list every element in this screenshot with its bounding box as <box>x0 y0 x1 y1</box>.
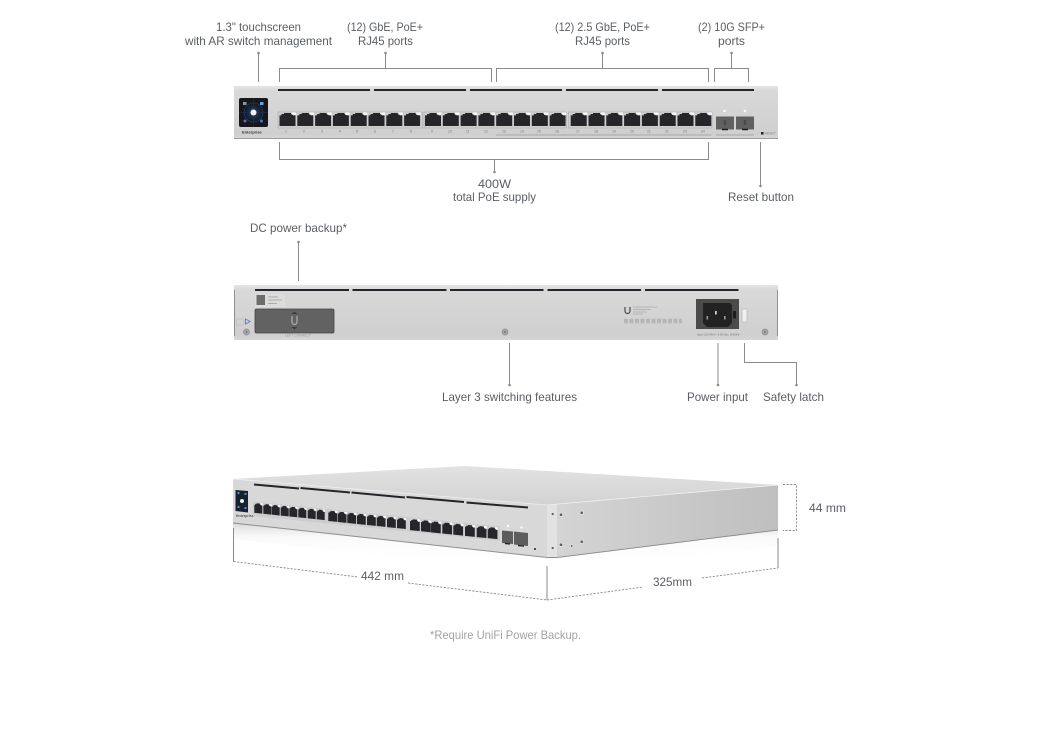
PoE indicator bars <box>496 134 754 136</box>
footnote: *Require UniFi Power Backup. <box>430 628 581 642</box>
callout: reset button <box>728 142 794 204</box>
port numbers: 3 <box>321 130 323 134</box>
callout: power input <box>687 343 749 404</box>
slots in perspective <box>254 484 528 508</box>
RJ45 port group frames <box>278 112 712 128</box>
port numbers: 17 <box>576 130 580 134</box>
callout: GbE ports <box>280 20 492 82</box>
panel: front view of switch <box>234 86 778 139</box>
port numbers: 23 <box>683 130 687 134</box>
callout: layer 3 switching: Layer 3 switching features <box>442 390 577 404</box>
screen in perspective: Enterprise <box>236 514 254 518</box>
rear screws <box>244 329 768 335</box>
port numbers: 11 <box>466 130 470 134</box>
reset button: RESET <box>764 132 776 136</box>
port numbers: 12 <box>484 130 488 134</box>
icon: blue arrow <box>236 319 250 325</box>
front corner band <box>547 504 557 557</box>
2.5 GbE RJ45 ports 17-24 <box>571 112 712 126</box>
shadow under device <box>233 523 778 573</box>
callout: SFP+ ports <box>698 20 765 82</box>
callout: GbE ports: (12) GbE, PoE+ <box>347 20 423 34</box>
port numbers: 1 <box>285 130 287 134</box>
vent slots <box>278 89 754 91</box>
compliance marks <box>624 307 682 321</box>
callout: SFP+ ports: ports <box>718 34 745 48</box>
callout: layer 3 switching <box>442 343 577 404</box>
port numbers: 2 <box>303 130 305 134</box>
callout: GbE ports: RJ45 ports <box>358 34 413 48</box>
top surface <box>233 466 778 505</box>
port numbers: 8 <box>410 130 412 134</box>
touchscreen: Enterprise <box>242 130 263 134</box>
port numbers: 5 <box>356 130 358 134</box>
port numbers <box>285 130 705 134</box>
DC power backup port cover <box>255 309 334 338</box>
port numbers: 19 <box>612 130 616 134</box>
port band <box>253 502 500 541</box>
power input socket: Input: 100-240V~ 6.5A Max. 50/60Hz <box>697 332 740 336</box>
screen in perspective <box>236 490 254 518</box>
port numbers: 14 <box>520 130 524 134</box>
dimension: depth 325 mm: 325mm <box>653 575 692 589</box>
power input socket <box>696 299 740 336</box>
dimension: width 442 mm <box>234 528 547 600</box>
callout: 2.5 GbE ports: RJ45 ports <box>575 34 630 48</box>
side screws <box>551 511 761 550</box>
panel: rear view of switch <box>234 285 778 340</box>
SFP+ ports in perspective <box>502 525 536 550</box>
panel: 3D view of switch <box>233 466 778 573</box>
QR label <box>255 294 285 307</box>
DC power backup port cover: LEFT CONNECT <box>285 334 311 338</box>
GbE RJ45 ports 1-8 <box>280 112 421 126</box>
port numbers: 13 <box>502 130 506 134</box>
port numbers: 21 <box>647 130 651 134</box>
port numbers: 16 <box>555 130 559 134</box>
callout: 400W PoE supply: 400W <box>478 177 512 191</box>
callout: touchscreen: 1.3" touchscreen <box>216 20 301 34</box>
callout: reset button: Reset button <box>728 190 794 204</box>
port numbers: 22 <box>665 130 669 134</box>
dimension: height 44 mm <box>783 484 846 530</box>
callout: touchscreen <box>184 20 333 82</box>
callout: 2.5 GbE ports: (12) 2.5 GbE, PoE+ <box>555 20 650 34</box>
port numbers: 9 <box>431 130 433 134</box>
front face <box>233 479 547 557</box>
callout: 400W PoE supply: total PoE supply <box>453 190 536 204</box>
callout: safety latch: Safety latch <box>763 390 824 404</box>
callout: safety latch <box>744 343 824 404</box>
callout: DC power backup: DC power backup* <box>250 221 347 235</box>
callout: SFP+ ports: (2) 10G SFP+ <box>698 20 765 34</box>
port numbers: 18 <box>594 130 598 134</box>
SFP+ ports <box>716 110 754 130</box>
ports in perspective <box>254 503 498 539</box>
port numbers: 15 <box>537 130 541 134</box>
dimension: width 442 mm: 442 mm <box>361 569 404 583</box>
dimension: height 44 mm: 44 mm <box>809 501 846 515</box>
port numbers: 20 <box>630 130 634 134</box>
port numbers: 10 <box>448 130 452 134</box>
safety latch <box>742 309 747 322</box>
callout: DC power backup <box>250 221 347 281</box>
port numbers: 4 <box>339 130 341 134</box>
callout: power input: Power input <box>687 390 749 404</box>
right side surface <box>557 485 778 557</box>
port numbers: 24 <box>701 130 705 134</box>
dimension: depth 325 mm <box>547 538 778 600</box>
RJ45 ports 9-16 <box>425 112 566 126</box>
rear vent slots <box>255 289 738 291</box>
callout: 400W PoE supply <box>280 142 708 204</box>
port numbers: 6 <box>374 130 376 134</box>
callout: 2.5 GbE ports <box>496 20 708 82</box>
touchscreen <box>239 98 268 134</box>
callout: touchscreen: with AR switch management <box>184 34 333 48</box>
port numbers: 7 <box>392 130 394 134</box>
